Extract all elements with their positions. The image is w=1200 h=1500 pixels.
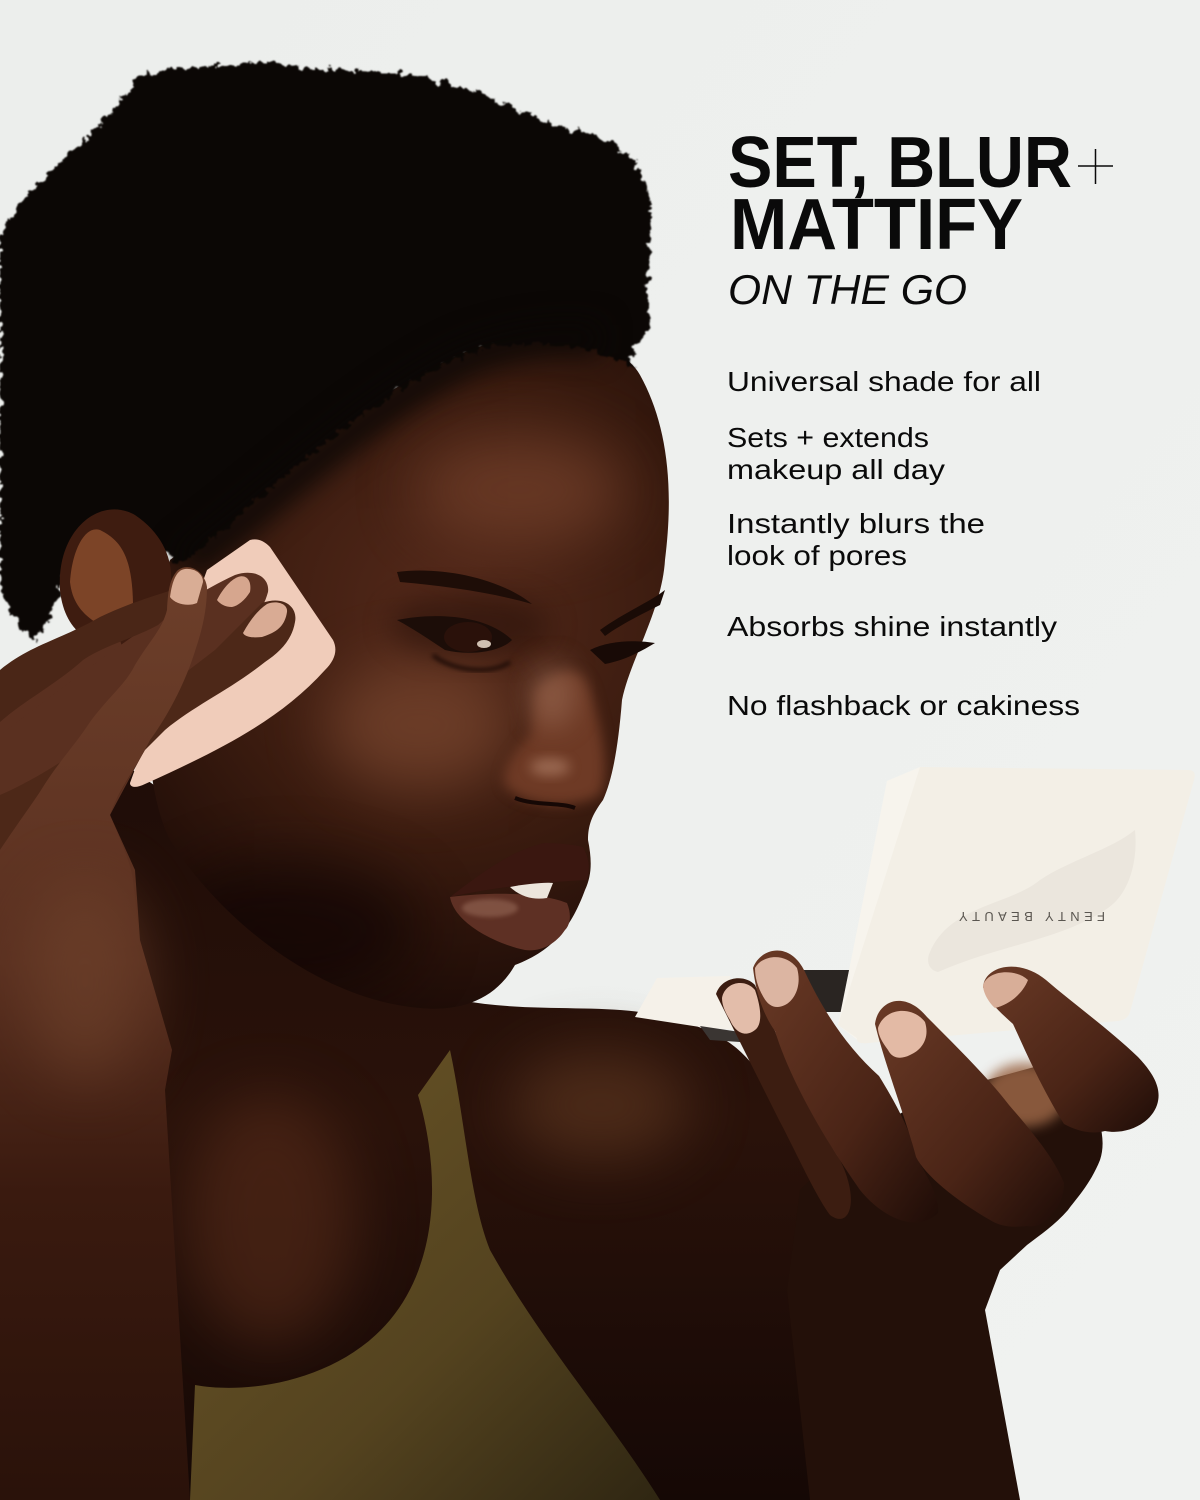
inner ear (70, 529, 133, 622)
lid face (838, 767, 1195, 1043)
compact hinge (700, 970, 850, 1042)
eye (397, 616, 512, 653)
heading line two: MATTIFY (730, 185, 1023, 265)
plus mark (1078, 149, 1113, 184)
nail: little (983, 972, 1028, 1008)
benefit: blurs pores: Instantly blurs the (727, 508, 985, 539)
compact lid (838, 767, 1195, 1043)
right hand (716, 950, 1159, 1227)
nail: ring (878, 1011, 927, 1058)
index finger (716, 978, 851, 1219)
benefit: blurs pores (727, 508, 985, 571)
hairline fade (185, 338, 600, 565)
far eyebrow (600, 590, 665, 636)
under-eye shadow (433, 655, 510, 670)
neck and shoulders (0, 740, 830, 1500)
left forearm (0, 640, 190, 1500)
chest highlight (185, 1095, 355, 1345)
benefits list (727, 366, 1080, 721)
right eyebrow (397, 570, 532, 604)
jaw shadow (206, 848, 421, 980)
nail: middle (755, 957, 799, 1007)
inner palm highlight (983, 1063, 1067, 1127)
little finger (983, 967, 1159, 1132)
thumb (0, 567, 207, 960)
hair (0, 60, 652, 640)
nostril (515, 798, 575, 808)
finger three (0, 601, 295, 900)
eye socket shadow (390, 593, 550, 657)
right wrist and palm (787, 1060, 1103, 1500)
lid side (838, 767, 920, 1042)
nail: finger three (243, 602, 287, 637)
benefit: no flashback: No flashback or cakiness (727, 690, 1080, 721)
benefit: blurs pores: look of pores (727, 540, 907, 571)
tank top (190, 1050, 660, 1500)
finger two (0, 573, 268, 790)
benefit: absorbs shine: Absorbs shine instantly (727, 611, 1057, 642)
benefit: sets and extends (727, 422, 945, 485)
nail: thumb (170, 569, 203, 605)
benefit: sets and extends: Sets + extends (727, 422, 929, 453)
lips (450, 843, 589, 950)
compact base (635, 976, 735, 1030)
nose (504, 671, 605, 805)
compact logo text: FENTY BEAUTY (959, 909, 1105, 924)
far eye (590, 641, 655, 664)
powder puff (130, 539, 335, 787)
cheek highlight (325, 660, 515, 790)
benefit: sets and extends: makeup all day (727, 454, 945, 485)
nail: finger two (217, 576, 250, 607)
heading line three: ON THE GO (728, 266, 967, 313)
shoulder highlight (510, 1050, 690, 1160)
finger one (0, 590, 175, 722)
wrist highlight (25, 880, 145, 1080)
compact script logo (928, 830, 1136, 972)
ear (60, 509, 171, 650)
face (148, 335, 669, 1009)
heading line one: SET, BLUR (728, 123, 1072, 203)
nose bridge highlight (528, 661, 576, 729)
left hand fingers (0, 567, 295, 960)
middle finger (753, 950, 938, 1222)
benefit: universal shade: Universal shade for all (727, 366, 1041, 397)
nail: index (722, 983, 760, 1034)
forehead highlight (415, 435, 625, 545)
heading (728, 123, 1113, 313)
nose tip highlight (530, 758, 570, 776)
ring finger (875, 1001, 1064, 1227)
